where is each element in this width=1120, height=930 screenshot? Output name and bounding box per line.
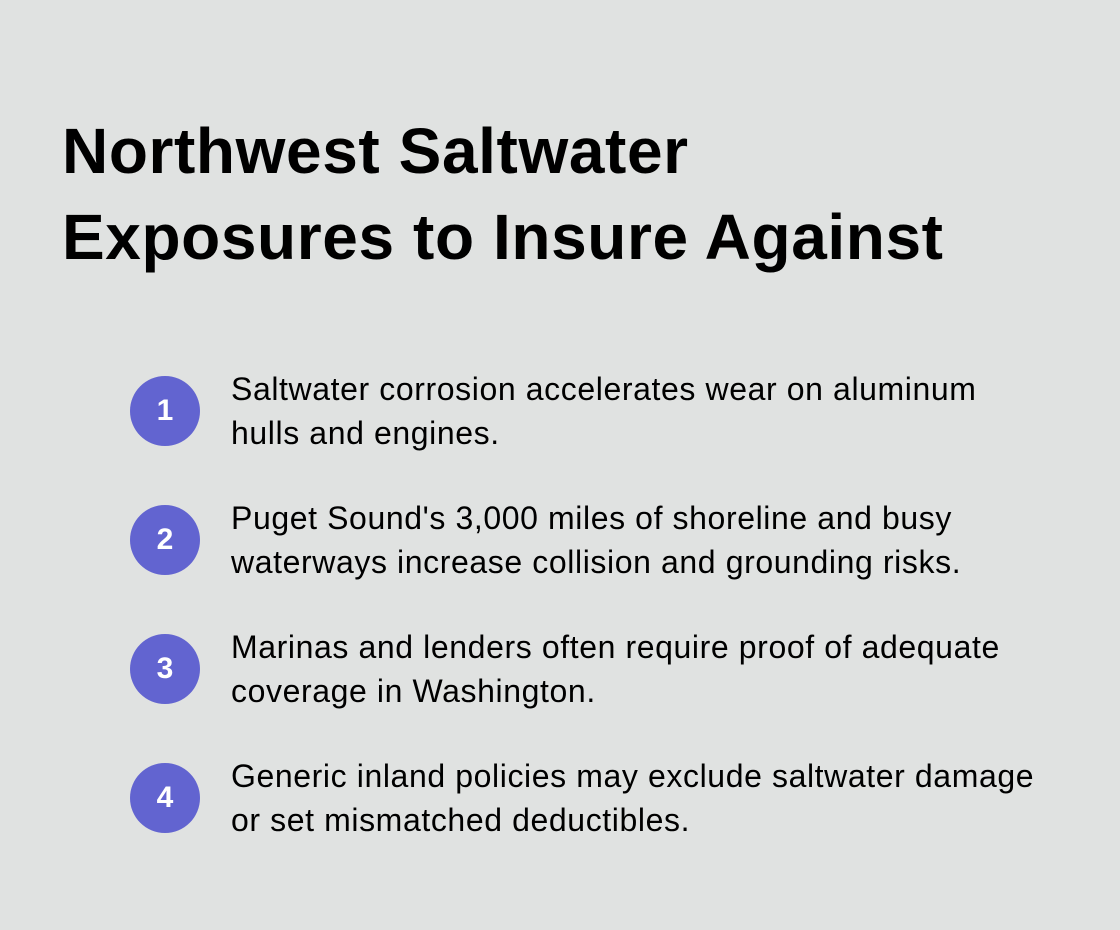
text 1: Saltwater corrosion accelerates wear on aluminum <box>231 371 977 407</box>
icon: number 2: 2 <box>157 523 173 556</box>
text 2 <box>231 500 961 580</box>
text 4 <box>231 758 1034 838</box>
text 4: or set mismatched deductibles. <box>231 802 690 838</box>
item 4 <box>130 758 1034 838</box>
icon: number 3 <box>130 634 200 704</box>
title: Northwest Saltwater <box>62 115 689 187</box>
text 1 <box>231 371 977 451</box>
text 2: waterways increase collision and grounding risks. <box>231 544 961 580</box>
icon: number 4 <box>130 763 200 833</box>
icon: number 2 <box>130 505 200 575</box>
title <box>62 115 944 273</box>
text 2: Puget Sound's 3,000 miles of shoreline and busy <box>231 500 952 536</box>
title: Exposures to Insure Against <box>62 201 944 273</box>
item 3 <box>130 629 1000 709</box>
text 3 <box>231 629 1000 709</box>
icon: number 1: 1 <box>157 394 173 427</box>
item 2 <box>130 500 961 580</box>
text 1: hulls and engines. <box>231 415 500 451</box>
icon: number 1 <box>130 376 200 446</box>
icon: number 4: 4 <box>157 781 173 814</box>
icon: number 3: 3 <box>157 652 173 685</box>
text 4: Generic inland policies may exclude saltwater damage <box>231 758 1034 794</box>
item 1 <box>130 371 977 451</box>
text 3: coverage in Washington. <box>231 673 596 709</box>
text 3: Marinas and lenders often require proof of adequate <box>231 629 1000 665</box>
